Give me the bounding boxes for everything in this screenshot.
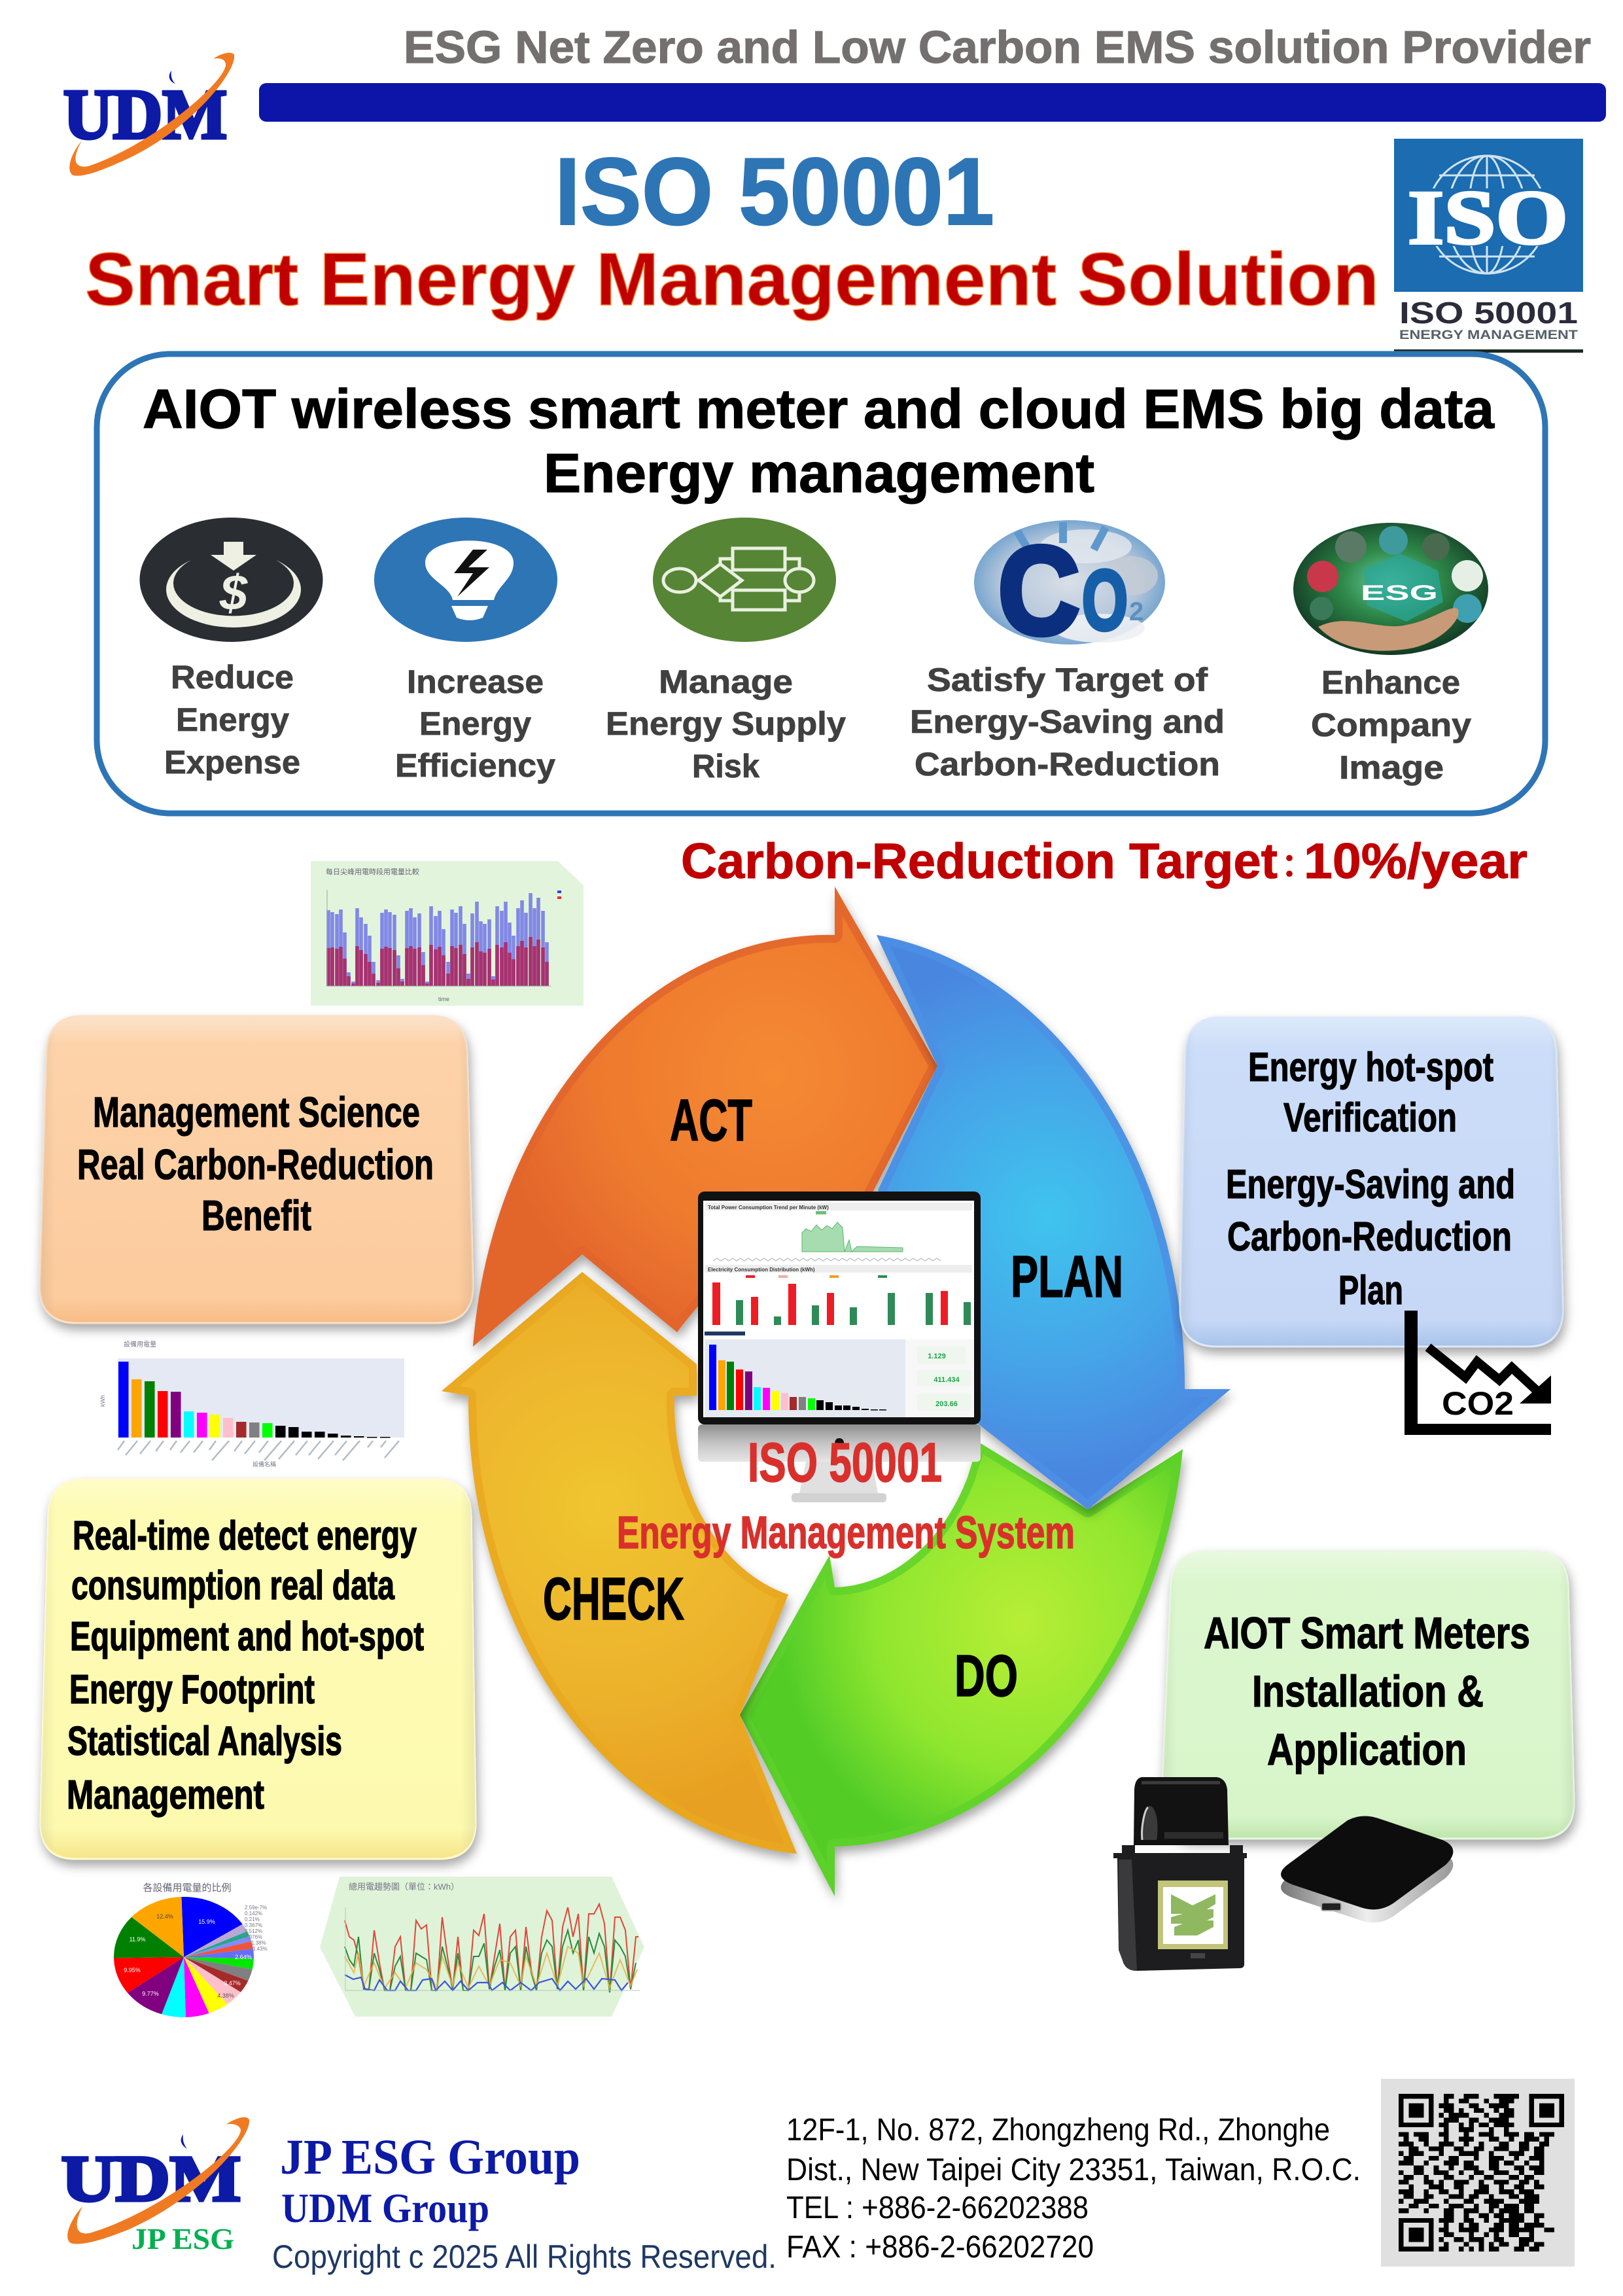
callout: PLAN box xyxy=(1180,1017,1563,1347)
icon: increase efficiency xyxy=(374,518,557,642)
logo: UDM top xyxy=(63,53,234,176)
footer: contact details: FAX : +886-2-66202720 xyxy=(786,2230,1094,2265)
logo: UDM top: UDM xyxy=(63,76,227,154)
icon: ISO 50001 badge xyxy=(1394,139,1583,353)
chart: equipment share pie: 11.9% xyxy=(130,1936,145,1943)
icon: reduce expense xyxy=(140,518,323,642)
label: enhance company image: Image xyxy=(1339,749,1444,786)
callout: CHECK box: consumption real data xyxy=(71,1563,394,1608)
icon: ESG image: ESG xyxy=(1361,581,1438,605)
logo: UDM footer xyxy=(61,2117,249,2255)
label: DO: DO xyxy=(954,1644,1018,1709)
callout: DO box: Installation & xyxy=(1252,1667,1484,1716)
logo: UDM footer: UDM xyxy=(61,2142,241,2215)
chart: equipment share pie: 15.9% xyxy=(198,1918,215,1925)
label: manage energy supply risk: Energy Supply xyxy=(606,705,846,742)
footer: group names: JP ESG Group xyxy=(280,2130,580,2185)
icon: ISO 50001 badge: ISO 50001 xyxy=(1399,296,1578,330)
label: Energy Management System: Energy Management System xyxy=(617,1507,1075,1558)
label: manage energy supply risk: Manage xyxy=(659,663,793,700)
label: satisfy target: Carbon-Reduction xyxy=(915,746,1220,783)
label: reduce energy expense xyxy=(164,659,300,781)
diagram: PDCA cycle xyxy=(442,887,1230,1896)
callout: CHECK box: Statistical Analysis xyxy=(67,1719,342,1764)
callout: ACT box: Benefit xyxy=(201,1192,311,1239)
callout: PLAN box: Plan xyxy=(1338,1268,1403,1313)
label: manage energy supply risk xyxy=(606,663,846,785)
icon: ISO 50001 badge: ISO xyxy=(1408,175,1568,260)
chart: equipment share pie: 0.512% xyxy=(245,1928,262,1934)
label: enhance company image: Enhance xyxy=(1321,664,1460,701)
label: increase energy efficiency: Energy xyxy=(419,705,531,742)
label: increase energy efficiency: Increase xyxy=(407,663,544,700)
monitor with EMS dashboard: 411.434 xyxy=(934,1376,960,1384)
chart: equipment share pie: 0.142% xyxy=(245,1911,262,1916)
icon: CO2 reduction chart: CO2 xyxy=(1442,1385,1514,1422)
chart: equipment share pie: 2.59e-7% xyxy=(245,1905,267,1911)
chart: equipment share pie: 9.77% xyxy=(142,1990,159,1997)
label: enhance company image: Company xyxy=(1311,707,1471,743)
footer: contact details xyxy=(786,2113,1361,2265)
monitor with EMS dashboard: Total Power Consumption Trend per Minute (kW) xyxy=(708,1205,829,1210)
callout: CHECK box: Energy Footprint xyxy=(69,1667,315,1712)
chart: weekly bars on green card: time xyxy=(438,996,449,1002)
chart: equipment share pie: 0.21% xyxy=(245,1916,260,1922)
heading: carbon reduction target: ： xyxy=(1273,849,1306,885)
panel heading line 2: Energy management xyxy=(544,442,1094,504)
icon: ISO 50001 badge: ENERGY MANAGEMENT xyxy=(1399,328,1578,342)
icon: CO2 target: O xyxy=(1082,552,1128,648)
callout: PLAN box: Energy-Saving and xyxy=(1226,1162,1515,1207)
monitor with EMS dashboard: 203.66 xyxy=(935,1400,958,1408)
chart: equipment share pie: 3.47% xyxy=(224,1980,241,1987)
label: JP ESG: JP ESG xyxy=(131,2222,234,2255)
chart: ranked equipment bars xyxy=(99,1340,404,1468)
footer: group names: Copyright c 2025 All Rights Reserved. xyxy=(272,2238,777,2275)
label: ACT: ACT xyxy=(670,1088,752,1154)
icon: ESG image xyxy=(1293,523,1488,655)
heading: carbon reduction target: Carbon-Reduction Target xyxy=(681,834,1278,889)
callout: CHECK box: Real-time detect energy xyxy=(73,1513,417,1559)
callout: ACT box xyxy=(40,1016,473,1323)
panel heading line 1: AIOT wireless smart meter and cloud EMS big data xyxy=(143,378,1495,440)
label: reduce energy expense: Reduce xyxy=(171,659,294,696)
label: enhance company image xyxy=(1311,664,1471,786)
arrow: ACT xyxy=(473,887,937,1347)
chart: equipment share pie: 1.43% xyxy=(253,1946,268,1952)
arrow: PLAN xyxy=(877,935,1230,1510)
label: PLAN: PLAN xyxy=(1011,1245,1123,1310)
header blue bar xyxy=(259,83,1606,122)
icon: CO2 target xyxy=(974,520,1165,660)
label: satisfy target: Satisfy Target of xyxy=(927,662,1208,698)
label: increase energy efficiency: Efficiency xyxy=(395,747,555,784)
chart: weekly bars on green card xyxy=(311,861,584,1006)
callout: ACT box: Management Science xyxy=(93,1088,420,1136)
icon: CO2 reduction chart xyxy=(1405,1311,1551,1435)
chart: equipment share pie: 1.38% xyxy=(251,1940,266,1946)
panel: AIOT benefits xyxy=(97,354,1545,813)
arrow: CHECK xyxy=(442,1272,797,1854)
footer: contact details: Dist., New Taipei City 23351, Taiwan, R.O.C. xyxy=(786,2153,1361,2187)
label: CHECK: CHECK xyxy=(543,1566,684,1633)
chart: line trend on green card xyxy=(320,1877,644,2017)
chart: equipment share pie: 4.38% xyxy=(217,1992,234,1999)
chart: ranked equipment bars: kWh xyxy=(99,1395,106,1407)
callout: CHECK box xyxy=(41,1479,476,1859)
monitor with EMS dashboard: 1.129 xyxy=(928,1352,946,1360)
chart: ranked equipment bars: 設備用電量 xyxy=(124,1340,156,1349)
callout: ACT box: Real Carbon-Reduction xyxy=(77,1140,434,1188)
chart: ranked equipment bars: 設備名稱 xyxy=(253,1460,276,1468)
callout: CHECK box: Management xyxy=(67,1773,264,1818)
callout: DO box: Application xyxy=(1267,1725,1467,1775)
callout: PLAN box: Carbon-Reduction xyxy=(1227,1214,1512,1260)
chart: equipment share pie: 0.367% xyxy=(245,1922,262,1928)
icon: black gateway pad xyxy=(1281,1816,1453,1922)
footer: contact details: 12F-1, No. 872, Zhongzheng Rd., Zhonghe xyxy=(786,2113,1330,2147)
icon: CO2 target: C xyxy=(998,521,1079,660)
chart: equipment share pie: 各設備用電量的比例 xyxy=(143,1882,232,1894)
icon: reduce expense: $ xyxy=(219,565,248,621)
heading: carbon reduction target: 10%/year xyxy=(1304,834,1527,889)
callout: PLAN box: Verification xyxy=(1283,1095,1457,1140)
footer: group names xyxy=(272,2130,777,2275)
icon: manage risk xyxy=(653,518,836,642)
icon: clamp smart meter xyxy=(1113,1777,1247,1971)
title: Smart Energy Management Solution: Smart Energy Management Solution xyxy=(85,238,1379,321)
icon: CO2 target: 2 xyxy=(1129,597,1143,626)
chart: equipment share pie xyxy=(124,1882,268,1999)
footer: group names: UDM Group xyxy=(281,2185,489,2231)
QR code xyxy=(1381,2079,1575,2267)
label: satisfy target: Energy-Saving and xyxy=(910,703,1225,740)
chart: equipment share pie: 2.64% xyxy=(235,1954,252,1960)
label: manage energy supply risk: Risk xyxy=(692,748,759,785)
chart: equipment share pie: 12.4% xyxy=(156,1913,173,1920)
callout: DO box xyxy=(1162,1551,1574,1839)
footer: contact details: TEL : +886-2-66202388 xyxy=(786,2191,1089,2225)
header tagline: ESG Net Zero and Low Carbon EMS solution Provider xyxy=(404,22,1591,73)
title: ISO 50001: ISO 50001 xyxy=(555,138,994,245)
label: reduce energy expense: Expense xyxy=(164,744,300,781)
chart: weekly bars on green card: 每日尖峰用電時段用電量比較 xyxy=(326,867,419,876)
chart: equipment share pie: 9.95% xyxy=(124,1967,141,1973)
callout: PLAN box: Energy hot-spot xyxy=(1248,1045,1493,1090)
monitor with EMS dashboard: Electricity Consumption Distribution (kWh) xyxy=(708,1267,815,1273)
label: increase energy efficiency xyxy=(395,663,555,784)
label: satisfy target xyxy=(910,662,1225,783)
monitor with EMS dashboard xyxy=(617,1192,1075,1558)
chart: equipment share pie: 0.976% xyxy=(245,1934,262,1940)
arrow: DO xyxy=(740,1442,1183,1896)
label: ISO 50001 on monitor: ISO 50001 xyxy=(748,1432,942,1493)
callout: CHECK box: Equipment and hot-spot xyxy=(70,1614,424,1659)
label: reduce energy expense: Energy xyxy=(176,701,289,738)
chart: line trend on green card: 總用電趨勢圖（單位：kWh） xyxy=(349,1882,459,1892)
callout: DO box: AIOT Smart Meters xyxy=(1204,1608,1530,1658)
